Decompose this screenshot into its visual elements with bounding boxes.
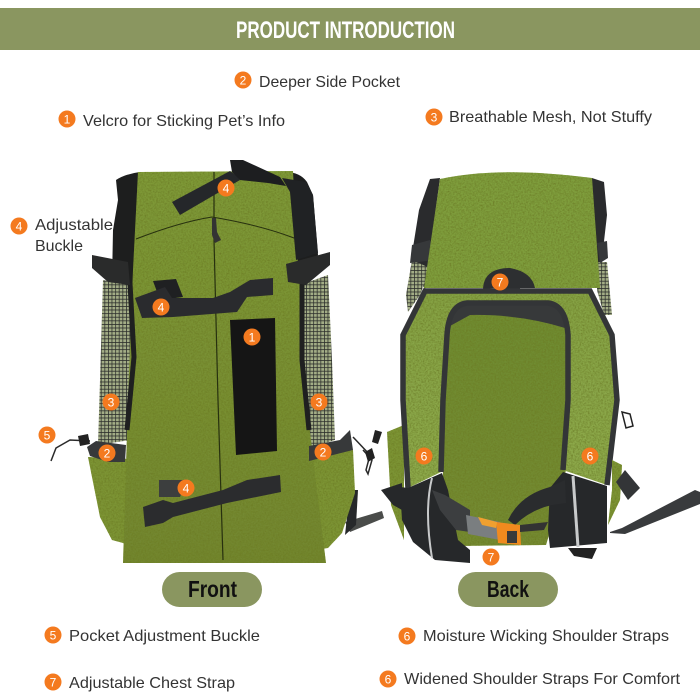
marker 7 bottom [482, 548, 500, 566]
seams [214, 172, 223, 560]
marker 3 right: 3 [316, 396, 323, 410]
right mesh pocket [300, 275, 335, 448]
callout: widened straps: Widened Shoulder Straps For Comfort [404, 671, 681, 688]
marker 3 left: 3 [108, 396, 115, 410]
callout: moisture wicking straps: Moisture Wicking Shoulder Straps [423, 628, 669, 645]
left black side panel [112, 172, 140, 290]
marker 4 lower: 4 [183, 482, 190, 496]
callout: widened straps: 6 [385, 672, 392, 686]
marker 6 right [582, 448, 598, 464]
upper strap and buckle [135, 278, 273, 318]
title banner [0, 8, 700, 50]
marker 6 left: 6 [421, 450, 428, 464]
neck shadow [450, 304, 565, 328]
right vertical strap [282, 178, 318, 260]
front label pill: Front [188, 576, 237, 602]
marker 3 right [310, 394, 328, 410]
front backpack [51, 160, 384, 563]
marker 7 top: 7 [497, 276, 504, 290]
handle [483, 268, 535, 294]
marker 2 left [98, 444, 116, 462]
callout: mesh: Breathable Mesh, Not Stuffy [449, 109, 652, 126]
callout: adjustable buckle [10, 217, 113, 255]
rear dark edge right [345, 490, 358, 535]
right top clip [622, 412, 633, 428]
right loop [616, 470, 640, 500]
right side green [608, 460, 622, 525]
marker 3 left [102, 394, 120, 410]
right lower pad [548, 472, 607, 548]
back label pill: Back [487, 576, 529, 602]
chest strap left [432, 490, 470, 532]
pocket cuffs [87, 441, 126, 462]
zipper pull [212, 218, 221, 243]
left side pocket [88, 457, 130, 546]
left drawcord [51, 440, 90, 461]
mesh inner edges [127, 283, 134, 430]
callout: moisture wicking straps: 6 [404, 630, 411, 644]
lower strap patch [159, 480, 187, 497]
marker 7 top [492, 274, 508, 290]
marker 2 left: 2 [104, 446, 111, 460]
back backpack [381, 172, 700, 563]
top buckle [230, 160, 286, 186]
upper strap patch [153, 279, 183, 300]
left mesh pocket [98, 280, 136, 445]
back left wing [381, 483, 402, 510]
long right strap [610, 490, 700, 534]
left lower pad [400, 473, 470, 563]
callout: mesh: 3 [431, 110, 438, 124]
chest strap right [508, 480, 566, 525]
callout: pocket adjustment buckle: Pocket Adjustment Buckle [69, 628, 260, 645]
marker 2 right: 2 [320, 446, 327, 460]
title banner: PRODUCT INTRODUCTION [236, 17, 455, 44]
velcro patch [230, 318, 277, 455]
tabs [410, 240, 435, 263]
inner green back [443, 300, 570, 546]
marker 4 lower [178, 480, 194, 496]
top strap [172, 171, 240, 215]
callout: chest strap: 7 [50, 676, 57, 690]
callout: side pocket: Deeper Side Pocket [259, 74, 401, 91]
back label pill [458, 572, 558, 607]
marker 5: 5 [44, 428, 51, 442]
marker 7 bottom: 7 [488, 550, 495, 564]
marker 4 upper [152, 298, 170, 316]
side buckles [92, 255, 130, 285]
marker 4 top [218, 180, 234, 196]
right drawcord [353, 437, 372, 474]
front label pill [162, 572, 262, 607]
lower strap [143, 475, 281, 527]
callout: adjustable buckle: Buckle [35, 238, 83, 255]
marker 6 left [416, 448, 432, 464]
marker 2 right [314, 444, 332, 460]
strap to the right of front bag [345, 511, 384, 532]
chest buckle [466, 515, 521, 545]
marker 1 [244, 328, 260, 346]
callout: adjustable buckle: 4 [16, 220, 23, 234]
callout: chest strap: Adjustable Chest Strap [69, 675, 235, 692]
callout: velcro: Velcro for Sticking Pet’s Info [83, 113, 285, 130]
right side pocket [300, 450, 355, 550]
side mesh [406, 260, 430, 312]
top panel fabric [424, 172, 600, 288]
small rear hook [520, 522, 548, 532]
callout: velcro: 1 [64, 112, 71, 126]
shoulder harness [403, 291, 617, 488]
main body fabric [123, 171, 326, 563]
top black sides [411, 178, 440, 290]
callout: pocket adjustment buckle: 5 [50, 628, 57, 642]
marker 4 upper: 4 [158, 300, 165, 314]
marker 6 right: 6 [587, 450, 594, 464]
marker 4 top: 4 [223, 182, 230, 196]
callout: side pocket: 2 [240, 74, 247, 88]
marker 1: 1 [249, 330, 256, 344]
marker 5 [38, 426, 56, 444]
right black side panel [285, 172, 318, 290]
left side pocket [387, 425, 404, 540]
callout: adjustable buckle: Adjustable [35, 217, 113, 234]
